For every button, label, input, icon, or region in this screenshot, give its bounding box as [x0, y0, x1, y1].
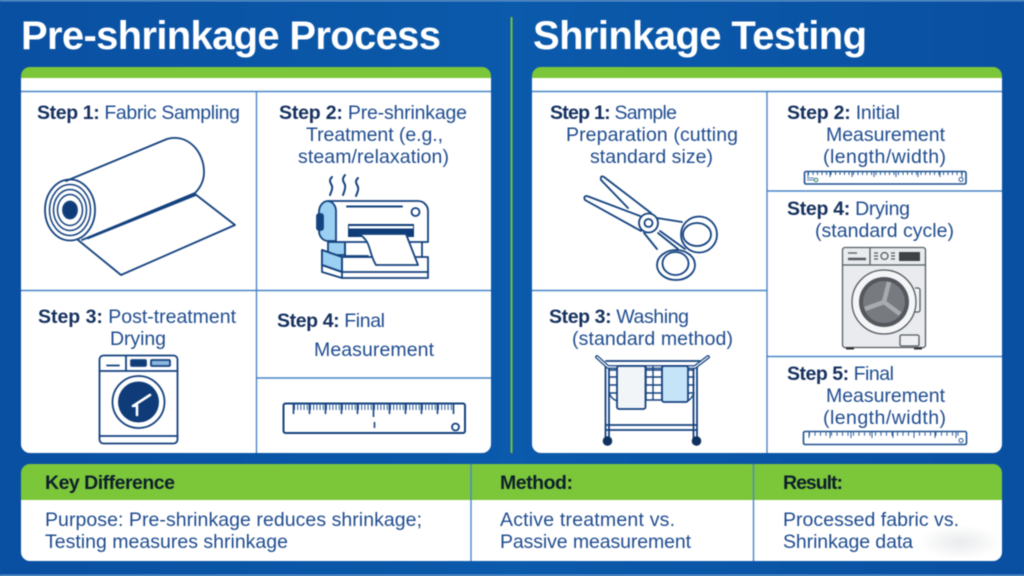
- step 2 text: Measurement: [826, 124, 946, 146]
- step 2 text: [279, 102, 467, 168]
- icon: fabric roll: [45, 138, 235, 275]
- text: result: [783, 509, 959, 553]
- text: purpose: Testing measures shrinkage: [45, 531, 288, 553]
- heading: method: Method:: [500, 472, 573, 494]
- text: method: Active treatment vs.: [500, 509, 675, 531]
- icon: dryer: [100, 356, 178, 444]
- step 4 text: [277, 310, 435, 361]
- panel: shrinkage testing: [532, 67, 1002, 453]
- step 1 text: [550, 102, 738, 168]
- step 2 text: [787, 102, 946, 168]
- step 4 text: [787, 198, 954, 242]
- step 1 text: standard size): [590, 146, 713, 168]
- step 5 text: Measurement: [826, 385, 946, 407]
- step 4 text: Step 4: Drying: [787, 198, 910, 220]
- step 3 text: Step 3: Washing: [549, 306, 689, 328]
- step 4 text: Measurement: [314, 339, 435, 361]
- step 5 text: (length/width): [823, 407, 946, 429]
- panel: key difference table: [21, 464, 1002, 561]
- text: result: Shrinkage data: [783, 531, 913, 553]
- step 1 text: Step 1: Sample: [550, 102, 677, 124]
- step 2 text: (length/width): [823, 146, 946, 168]
- icon: small ruler: [804, 172, 966, 184]
- icon: washing machine: [842, 248, 926, 350]
- text: purpose: Purpose: Pre-shrinkage reduces shrinkage;: [45, 509, 422, 531]
- step 5 text: Step 5: Final: [787, 363, 894, 385]
- icon: scissors: [584, 176, 717, 280]
- step 2 text: Step 2: Pre-shrinkage: [279, 102, 467, 124]
- text: method: Passive measurement: [500, 531, 692, 553]
- title: pre-shrinkage process: Pre-shrinkage Process: [21, 14, 441, 58]
- step 3 text: Drying: [110, 328, 166, 350]
- step 4 text: Step 4: Final: [277, 310, 385, 332]
- step 5 text: [787, 363, 946, 429]
- step 3 text: (standard method): [572, 328, 733, 350]
- step 1 text: Step 1: Fabric Sampling: [37, 102, 240, 124]
- step 3 text: [549, 306, 733, 350]
- icon: small ruler: [804, 432, 966, 444]
- step 2 text: Step 2: Initial: [787, 102, 900, 124]
- text: result: Processed fabric vs.: [783, 509, 959, 531]
- icon: steam machine: [317, 175, 428, 278]
- panel: pre-shrinkage process: [21, 67, 491, 453]
- step 2 text: steam/relaxation): [298, 146, 449, 168]
- text: purpose: [45, 509, 422, 553]
- step 2 text: Treatment (e.g.,: [306, 124, 443, 146]
- heading: result: Result:: [783, 472, 843, 494]
- step 3 text: Step 3: Post-treatment: [38, 306, 237, 328]
- icon: ruler: [284, 404, 465, 433]
- icon: drying rack: [597, 357, 708, 446]
- text: method: [500, 509, 692, 553]
- heading: key difference: Key Difference: [45, 472, 175, 494]
- center divider: [510, 17, 512, 453]
- step 4 text: (standard cycle): [815, 220, 954, 242]
- step 3 text: [38, 306, 237, 350]
- step 1 text: Preparation (cutting: [566, 124, 738, 146]
- title: shrinkage testing: Shrinkage Testing: [533, 14, 867, 58]
